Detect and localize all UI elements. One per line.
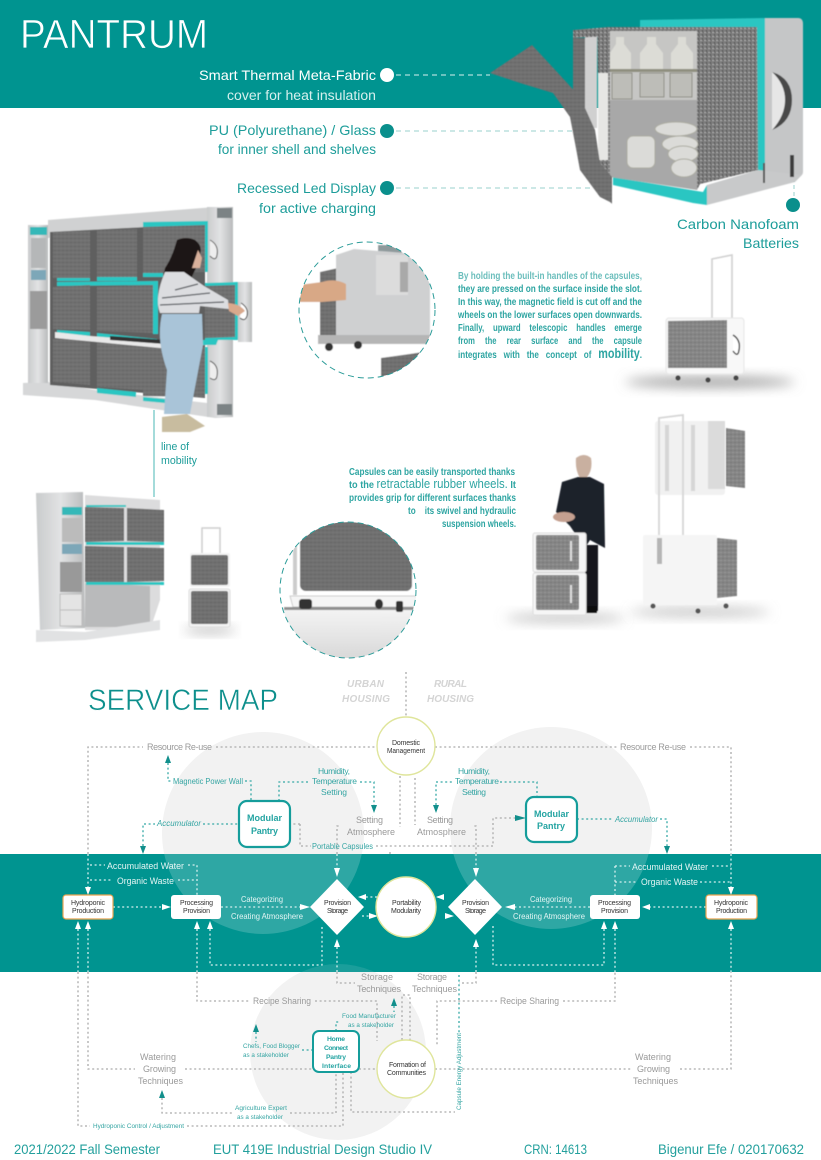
connector labels: Agriculture Expert <box>235 1105 287 1112</box>
callout: smart thermal meta-fabric: Smart Thermal Meta-Fabric <box>199 67 376 83</box>
middle band <box>0 854 821 972</box>
housing labels: URBAN <box>347 679 385 690</box>
connector labels: Humidity, <box>458 766 490 776</box>
connector labels: Temperature <box>455 776 499 786</box>
connector labels: Storage <box>361 972 393 982</box>
node: formation of communities: Communities <box>387 1070 426 1077</box>
node: formation of communities: Formation of <box>389 1062 426 1069</box>
illustration: stacked capsules with handle <box>184 528 236 633</box>
text block: mobility description: integrates with the concept of mobility. <box>458 345 642 361</box>
illustration: wall unit with woman <box>23 207 252 432</box>
connector labels: Accumulated Water <box>107 861 184 871</box>
text block: mobility description: Finally, upward telescopic handles emerge <box>458 322 642 334</box>
connector labels: Resource Re-use <box>147 742 212 752</box>
connector labels: Recipe Sharing <box>253 996 311 1006</box>
arrowheads <box>140 755 670 1098</box>
illustration: small wall unit <box>36 492 164 642</box>
node: modular pantry right <box>526 797 577 842</box>
housing labels: RURAL <box>434 679 467 690</box>
illustration: capsule with telescopic handle <box>625 255 795 387</box>
node: domestic management <box>377 717 435 775</box>
text block: mobility description <box>457 270 642 361</box>
connector labels: Resource Re-use <box>620 742 686 752</box>
connector labels: Atmosphere <box>417 827 466 837</box>
text block: mobility description: from the rear surface and the capsule <box>458 335 642 347</box>
connector labels: Capsule Energy Adjustment <box>456 1033 463 1110</box>
connector labels: Growing <box>637 1064 670 1074</box>
connector labels: Magnetic Power Wall <box>173 776 243 786</box>
node: domestic management: Domestic <box>392 740 420 747</box>
connector labels: Storage <box>417 972 447 982</box>
text block: mobility description: By holding the built-in handles of the capsules, <box>458 270 642 282</box>
callout: carbon nanofoam batteries <box>677 178 800 251</box>
dotted connectors: grey <box>78 672 731 1126</box>
node: home connect pantry interface <box>313 1031 359 1072</box>
connector labels: Accumulator <box>156 818 202 828</box>
text block: retractable wheels: provides grip for different surfaces thanks <box>349 492 516 504</box>
callout: smart thermal meta-fabric: cover for heat insulation <box>227 88 376 103</box>
connector labels: Categorizing <box>241 894 283 904</box>
detail circle: pressing handle <box>299 242 436 378</box>
node: home connect pantry interface: Pantry <box>326 1054 346 1061</box>
connector labels: Temperature <box>312 776 357 786</box>
text block: mobility description: they are pressed on the surface inside the slot. <box>458 283 642 295</box>
footer: EUT 419E Industrial Design Studio IV <box>213 1141 433 1157</box>
connector labels: Atmosphere <box>347 827 395 837</box>
footer <box>14 1141 804 1157</box>
connector labels: Categorizing <box>530 894 572 904</box>
node: home connect pantry interface: Interface <box>322 1063 351 1070</box>
background circles <box>162 727 652 1140</box>
node: processing provision left: Processing <box>180 900 213 907</box>
node: provision storage left: Storage <box>327 908 348 915</box>
node: portability modularity <box>376 877 436 937</box>
node: processing provision right: Processing <box>598 900 631 907</box>
connector labels: Setting <box>321 787 347 797</box>
node: processing provision left <box>171 895 221 919</box>
dotted connectors: teal <box>143 763 667 1050</box>
footer: Bigenur Efe / 020170632 <box>658 1141 804 1157</box>
callout: PU glass: for inner shell and shelves <box>218 142 376 157</box>
node: processing provision right: Provision <box>601 908 628 915</box>
housing labels: HOUSING <box>427 694 474 705</box>
connector labels: Watering <box>140 1052 176 1062</box>
callouts: materials <box>199 67 800 251</box>
node: processing provision left: Provision <box>183 908 210 915</box>
connector labels: Creating Atmosphere <box>513 911 585 921</box>
connector labels: Techniques <box>633 1076 678 1086</box>
callout: PU glass: PU (Polyurethane) / Glass <box>209 122 376 138</box>
connector labels: Chefs, Food Blogger <box>243 1043 301 1050</box>
callout: carbon nanofoam batteries: Carbon Nanofoam <box>677 216 799 232</box>
top banner <box>0 0 821 108</box>
connector labels: Setting <box>356 815 383 825</box>
connector labels: Accumulated Water <box>632 862 708 872</box>
node: provision storage left <box>310 879 364 935</box>
node: provision storage right: Provision <box>462 900 489 907</box>
node: portability modularity: Portability <box>392 900 422 907</box>
footer: CRN: 14613 <box>524 1141 587 1157</box>
line of mobility: mobility <box>161 455 197 467</box>
node: processing provision right <box>590 895 640 919</box>
line of mobility: line of <box>161 441 190 453</box>
line of mobility <box>154 410 197 497</box>
dotted connectors: white in band <box>78 854 731 972</box>
text block: retractable wheels: to its swivel and hydraulic <box>408 505 516 517</box>
connector labels: Portable Capsules <box>312 841 373 851</box>
node: modular pantry left: Modular <box>247 813 282 823</box>
service map connectors <box>75 672 734 1126</box>
text block: mobility description: wheels on the lower surfaces open downwards. <box>457 309 642 321</box>
connector labels: Watering <box>635 1052 671 1062</box>
node: modular pantry left: Pantry <box>251 826 278 836</box>
node: hydroponic production right: Hydroponic <box>714 900 748 907</box>
band circle overlays <box>164 854 648 972</box>
connector labels: Setting <box>462 787 486 797</box>
text block: retractable wheels <box>349 466 516 530</box>
connector labels: Food Manufacturer <box>342 1013 397 1020</box>
node: provision storage left: Provision <box>324 900 351 907</box>
connector labels: as a stakeholder <box>237 1114 284 1121</box>
callout: recessed led display: Recessed Led Display <box>237 180 376 196</box>
text block: mobility description: In this way, the magnetic field is cut off and the <box>458 296 642 308</box>
woman <box>163 238 201 302</box>
illustration: man with stacked capsules <box>505 455 625 622</box>
connector labels: as a stakeholder <box>348 1022 395 1029</box>
node: provision storage right: Storage <box>465 908 486 915</box>
node: modular pantry left <box>239 801 290 847</box>
node: hydroponic production right <box>706 895 757 919</box>
connector labels: Humidity, <box>318 766 350 776</box>
connector labels: Accumulator <box>614 814 659 824</box>
callout: smart thermal meta-fabric <box>199 67 490 103</box>
connector labels: Techniques <box>412 984 458 994</box>
node: portability modularity: Modularity <box>391 908 422 915</box>
node: home connect pantry interface: Connect <box>324 1045 349 1052</box>
heading: service map: SERVICE MAP <box>88 684 278 717</box>
illustration: capsules separating <box>630 415 770 616</box>
text block: retractable wheels: to the retractable rubber wheels. It <box>349 476 516 491</box>
node: modular pantry right: Pantry <box>537 821 565 831</box>
node: hydroponic production left <box>63 895 113 919</box>
housing labels <box>342 679 474 705</box>
connector labels: Organic Waste <box>641 877 698 887</box>
title: PANTRUM <box>20 11 208 57</box>
connector labels <box>93 742 708 1130</box>
connector labels: Setting <box>427 815 453 825</box>
node: provision storage right <box>448 879 502 935</box>
node: hydroponic production right: Production <box>716 908 747 915</box>
callout: carbon nanofoam batteries: Batteries <box>743 235 799 251</box>
connector labels: Hydroponic Control / Adjustment <box>93 1123 184 1130</box>
housing labels: HOUSING <box>342 694 390 705</box>
callout: recessed led display <box>237 180 592 216</box>
node: hydroponic production left: Hydroponic <box>71 900 106 907</box>
callout: PU glass <box>209 122 575 157</box>
callout: recessed led display: for active charging <box>259 201 376 216</box>
detail circle: wheels <box>280 522 416 660</box>
footer: 2021/2022 Fall Semester <box>14 1141 160 1157</box>
connector labels: Techniques <box>357 984 402 994</box>
node: modular pantry right: Modular <box>534 809 569 819</box>
connector labels: Recipe Sharing <box>500 996 559 1006</box>
node: home connect pantry interface: Home <box>327 1036 345 1043</box>
connector labels: Organic Waste <box>117 876 174 886</box>
node: hydroponic production left: Production <box>72 908 104 915</box>
connector labels: as a stakeholder <box>243 1052 290 1059</box>
node: domestic management: Management <box>387 748 425 755</box>
connector labels: Growing <box>143 1064 176 1074</box>
text block: retractable wheels: suspension wheels. <box>442 518 516 530</box>
connector labels: Creating Atmosphere <box>231 911 303 921</box>
illustration: opened capsule with fabric cover <box>490 18 803 205</box>
node: formation of communities <box>377 1040 435 1098</box>
text block: retractable wheels: Capsules can be easily transported thanks <box>349 466 515 478</box>
connector labels: Techniques <box>138 1076 184 1086</box>
